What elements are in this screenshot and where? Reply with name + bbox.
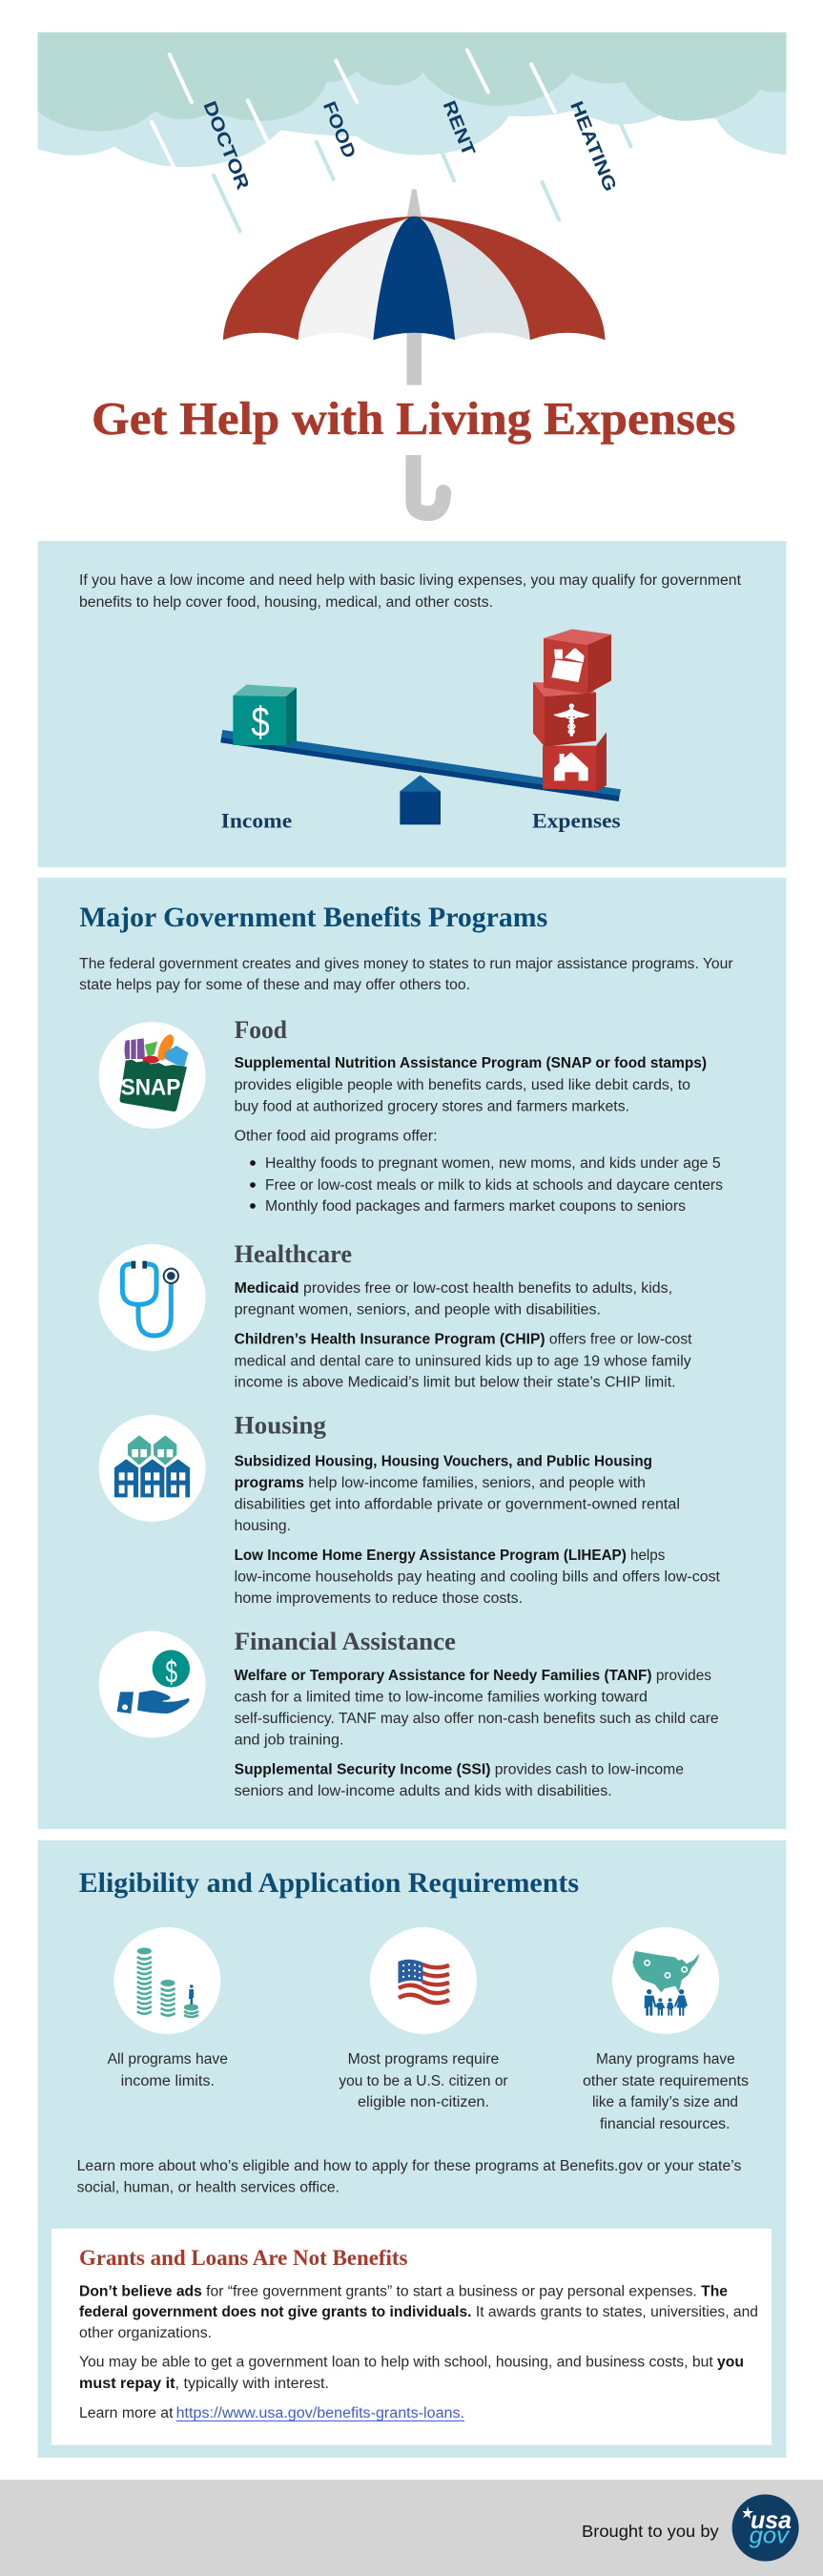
healthcare text: Medicaid provides free or low-cost health benefits to adults, kids, [235, 1280, 672, 1297]
healthcare text: pregnant women, seniors, and people with disabilities. [235, 1302, 601, 1319]
caption: state rules: like a family’s size and [592, 2094, 738, 2110]
financial assistance text: Welfare or Temporary Assistance for Needy Families (TANF) provides [235, 1668, 711, 1684]
healthcare text: income is above Medicaid’s limit but below their state’s CHIP limit. [235, 1375, 676, 1391]
expense cube: groceries [544, 629, 611, 694]
housing text: Subsidized Housing, Housing Vouchers, and Public Housing [235, 1454, 652, 1470]
programs intro text [79, 956, 733, 993]
requirement: citizenship [339, 1927, 508, 2110]
header: storm and umbrella [38, 32, 786, 513]
balance scale chart [220, 629, 621, 824]
income cube with dollar sign [233, 685, 297, 746]
housing text: housing. [235, 1518, 291, 1534]
caption: citizenship: Most programs require [348, 2051, 499, 2067]
scale labels: Income [221, 808, 292, 832]
rain labels: FOOD [319, 99, 360, 161]
healthcare text: Children’s Health Insurance Program (CHIP) offers free or low-cost [235, 1332, 692, 1348]
healthcare program [99, 1240, 692, 1391]
housing program [99, 1412, 721, 1607]
food bullet list: Monthly food packages and farmers market coupons to seniors [265, 1198, 686, 1215]
icon: houses [99, 1415, 206, 1522]
learn more text: social, human, or health services office. [77, 2180, 339, 2196]
callout text: Don’t believe ads for “free government grants” to start a business or pay personal expenses. The [79, 2284, 728, 2300]
caption: citizenship: eligible non-citizen. [358, 2094, 489, 2110]
food text: provides eligible people with benefits cards, used like debit cards, to [235, 1077, 690, 1093]
requirement: income limits [108, 1927, 228, 2089]
heading: Healthcare: Healthcare [235, 1240, 352, 1268]
heading: Financial Assistance: Financial Assistance [235, 1628, 456, 1655]
callout text [79, 2284, 758, 2392]
learn more link: Learn more at [79, 2405, 174, 2421]
rain labels: DOCTOR [199, 98, 253, 193]
food text [235, 1055, 707, 1145]
food text: Other food aid programs offer: [235, 1129, 437, 1145]
financial assistance text [235, 1668, 719, 1799]
umbrella [223, 189, 606, 513]
caption: state rules: other state requirements [583, 2073, 749, 2089]
housing text [235, 1454, 721, 1607]
footer credit text: Brought to you by [582, 2522, 719, 2541]
housing text: home improvements to reduce those costs. [235, 1590, 523, 1607]
caption: citizenship: you to be a U.S. citizen or [339, 2073, 508, 2089]
healthcare text [235, 1280, 692, 1391]
callout: grants and loans [51, 2229, 772, 2445]
scale labels: Expenses [532, 808, 621, 832]
caption: income limits: All programs have [108, 2051, 228, 2067]
heading: grants and loans: Grants and Loans Are Not Benefits [79, 2246, 408, 2270]
programs intro text: state helps pay for some of these and may offer others too. [79, 977, 470, 993]
icon: US flag [370, 1927, 477, 2034]
scale beam [220, 730, 621, 801]
food bullet list [250, 1155, 723, 1215]
intro text: benefits to help cover food, housing, medical, and other costs. [79, 594, 493, 611]
caption: citizenship [339, 2051, 508, 2110]
caption: income limits: income limits. [121, 2073, 215, 2089]
intro text [79, 572, 742, 611]
callout text: must repay it , typically with interest. [79, 2376, 329, 2392]
panel: eligibility and application requirements [38, 1840, 786, 2458]
financial assistance text: self-sufficiency. TANF may also offer non-cash benefits such as child care [235, 1711, 719, 1727]
icon: SNAP grocery bag: SNAP [121, 1074, 180, 1100]
housing text: Low Income Home Energy Assistance Program (LIHEAP) helps [235, 1548, 666, 1564]
icon: stethoscope [99, 1244, 206, 1351]
clouds [38, 32, 786, 231]
icon: hand with coin: $ [165, 1654, 177, 1690]
food bullet list: Free or low-cost meals or milk to kids at schools and daycare centers [265, 1177, 723, 1194]
rain labels: HEATING [566, 98, 620, 195]
requirement: state rules [583, 1927, 749, 2132]
housing text: disabilities get into affordable private or government-owned rental [235, 1497, 680, 1513]
income cube with dollar sign: $ [251, 700, 270, 746]
food program [99, 1016, 723, 1215]
learn more text [77, 2158, 742, 2196]
icon: SNAP grocery bag [99, 1022, 206, 1129]
heading: eligibility: Eligibility and Application Requirements [79, 1867, 579, 1899]
icon: USA.gov logo: usa [751, 2505, 792, 2534]
caption: state rules: Many programs have [596, 2051, 735, 2067]
financial assistance program [99, 1628, 719, 1799]
callout text: other organizations. [79, 2325, 212, 2341]
learn more link: https://www.usa.gov/benefits-grants-loans. [176, 2405, 464, 2421]
heading: Food: Food [235, 1016, 288, 1044]
caption: state rules [583, 2051, 749, 2132]
scale labels [221, 808, 621, 832]
icon: coin stacks [113, 1927, 220, 2034]
rain labels [199, 98, 620, 195]
caption: income limits [108, 2051, 228, 2089]
panel: major government benefits programs [38, 878, 786, 1829]
title: Get Help with Living Expenses [92, 392, 736, 445]
icon: US map and family [612, 1927, 719, 2034]
financial assistance text: seniors and low-income adults and kids with disabilities. [235, 1783, 612, 1799]
callout text: federal government does not give grants to individuals. It awards grants to states, universities, and [79, 2304, 758, 2320]
food text: buy food at authorized grocery stores and farmers markets. [235, 1099, 629, 1115]
housing text: programs help low-income families, seniors, and people with [235, 1475, 646, 1491]
panel: intro with balance scale [38, 541, 786, 867]
food bullet list: Healthy foods to pregnant women, new moms, and kids under age 5 [265, 1155, 721, 1172]
healthcare text: medical and dental care to uninsured kids up to age 19 whose family [235, 1353, 691, 1369]
footer band [0, 2480, 823, 2576]
caption: state rules: financial resources. [600, 2116, 730, 2132]
icon: hand with coin [99, 1631, 206, 1738]
heading: major programs: Major Government Benefits Programs [79, 902, 547, 933]
financial assistance text: Supplemental Security Income (SSI) provides cash to low-income [235, 1762, 684, 1778]
expense cube: house [543, 732, 607, 791]
housing text: low-income households pay heating and cooling bills and offers low-cost [235, 1569, 721, 1586]
food text: Supplemental Nutrition Assistance Program (SNAP or food stamps) [235, 1055, 707, 1071]
expense cube: medical [533, 682, 596, 747]
icon: USA.gov logo: gov [750, 2524, 791, 2549]
intro text: If you have a low income and need help with basic living expenses, you may qualify for government [79, 572, 742, 589]
rain labels: RENT [439, 98, 479, 159]
icon: USA.gov logo [732, 2494, 799, 2561]
programs intro text: The federal government creates and gives money to states to run major assistance programs. Your [79, 956, 733, 972]
financial assistance text: and job training. [235, 1733, 343, 1749]
heading: Housing: Housing [235, 1412, 326, 1440]
learn more text: Learn more about who’s eligible and how to apply for these programs at Benefits.gov or your state’s [77, 2158, 742, 2174]
financial assistance text: cash for a limited time to low-income families working toward [235, 1690, 648, 1706]
fulcrum [400, 775, 441, 824]
callout text: You may be able to get a government loan to help with school, housing, and business costs, but you [79, 2355, 744, 2371]
